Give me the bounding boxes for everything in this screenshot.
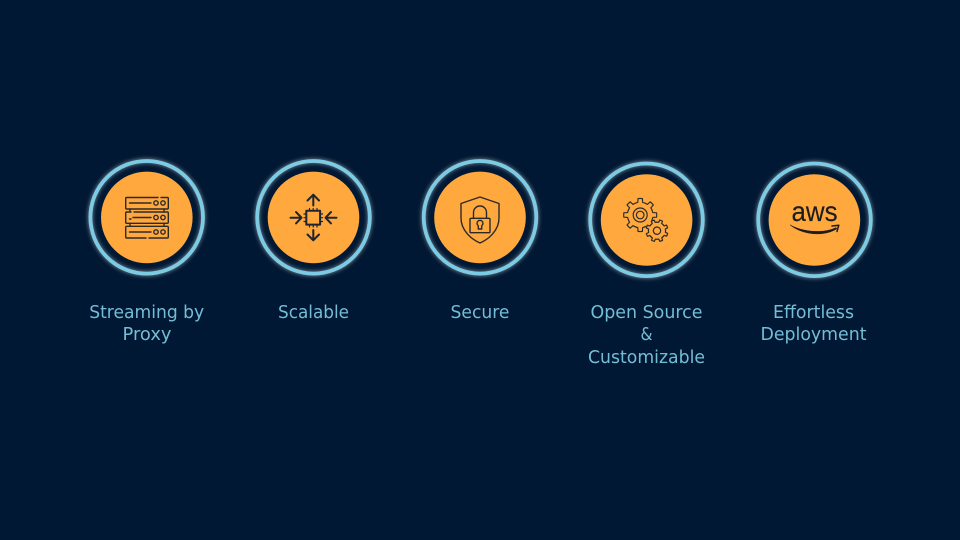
feature: secure <box>424 161 536 323</box>
orange disc 2 <box>268 172 359 263</box>
orange disc 5 <box>769 174 860 266</box>
orange disc 4 <box>601 174 692 266</box>
label 4 <box>588 302 705 368</box>
icon: chip with arrows <box>290 195 336 240</box>
label 4: Customizable <box>588 347 705 368</box>
ring 1 <box>90 161 203 274</box>
icon: aws logo: aws <box>792 196 838 227</box>
large gear <box>624 198 657 232</box>
ring 4 <box>590 164 703 276</box>
small gear <box>642 216 672 246</box>
feature: open source and customizable <box>588 164 705 368</box>
ring 2 <box>257 161 370 274</box>
icon: shield with padlock <box>461 197 499 243</box>
feature: streaming by proxy <box>89 161 204 345</box>
ring 5 <box>758 164 871 276</box>
icon: server rack <box>126 198 168 238</box>
icon: gears <box>624 198 672 246</box>
label 3: Secure <box>450 302 510 323</box>
label 4: & <box>640 324 653 345</box>
label 1 <box>89 302 204 345</box>
label 5: Effortless <box>773 302 854 323</box>
label 5: Deployment <box>760 324 867 345</box>
label 1: Proxy <box>122 324 172 345</box>
label 4: Open Source <box>590 302 702 323</box>
feature: effortless deployment <box>758 164 871 345</box>
label 2: Scalable <box>278 302 349 323</box>
orange disc 1 <box>101 172 193 263</box>
orange disc 3 <box>434 172 526 263</box>
ring 3 <box>424 161 536 274</box>
label 1: Streaming by <box>89 302 204 323</box>
label 5 <box>760 302 867 345</box>
feature: scalable <box>257 161 370 323</box>
